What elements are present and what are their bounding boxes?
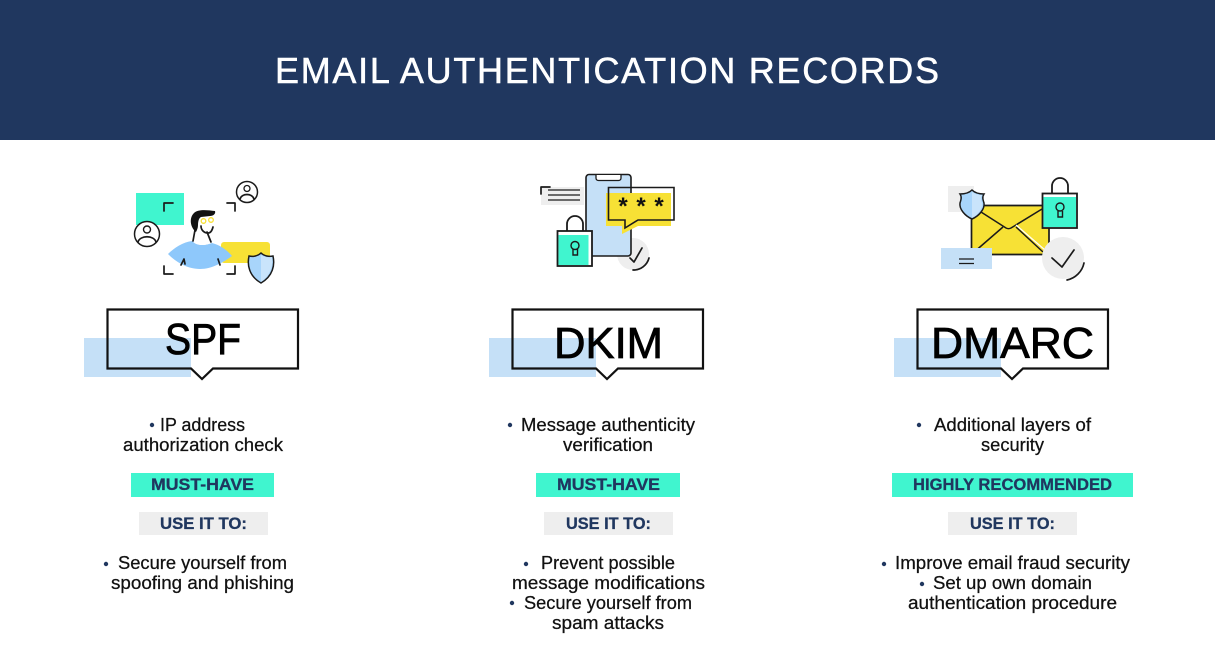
label: use it to bbox=[948, 512, 1077, 535]
badge: must-have: MUST-HAVE bbox=[151, 475, 254, 494]
use list bbox=[104, 553, 294, 593]
icon: phone with password bubble and lock: * bbox=[636, 193, 646, 220]
heading: DKIM bbox=[554, 319, 663, 368]
description: Additional layers of bbox=[934, 415, 1092, 435]
description bbox=[917, 415, 1092, 455]
icon: phone with password bubble and lock: * bbox=[654, 193, 664, 220]
label: use it to bbox=[544, 512, 673, 535]
use list: spam attacks bbox=[552, 613, 664, 633]
description: security bbox=[981, 435, 1044, 455]
use list: spoofing and phishing bbox=[111, 573, 294, 593]
DKIM callout bbox=[489, 310, 703, 379]
badge: must-have: MUST-HAVE bbox=[557, 475, 660, 494]
use list: message modifications bbox=[512, 573, 705, 593]
description bbox=[508, 415, 695, 455]
label: use it to: USE IT TO: bbox=[160, 514, 247, 533]
label: use it to: USE IT TO: bbox=[566, 514, 651, 533]
badge: must-have bbox=[536, 473, 680, 497]
header band bbox=[0, 0, 1215, 140]
heading: DMARC bbox=[931, 319, 1094, 368]
panel: DMARC bbox=[882, 178, 1133, 613]
DMARC callout bbox=[894, 310, 1108, 379]
panel: DKIM bbox=[489, 174, 705, 633]
description: IP address bbox=[160, 415, 245, 435]
SPF callout bbox=[84, 310, 298, 379]
description: authorization check bbox=[123, 435, 284, 455]
title: EMAIL AUTHENTICATION RECORDS bbox=[275, 50, 939, 91]
heading: SPF bbox=[165, 315, 241, 364]
badge: must-have bbox=[131, 473, 274, 497]
description: Message authenticity bbox=[521, 415, 695, 435]
use list bbox=[882, 553, 1130, 613]
use list: Secure yourself from bbox=[524, 593, 692, 613]
description: verification bbox=[563, 435, 653, 455]
panel: SPF bbox=[84, 182, 298, 593]
use list: Secure yourself from bbox=[118, 553, 287, 573]
description bbox=[123, 415, 284, 455]
icon: person with profiles and shield bbox=[134, 182, 274, 283]
icon: phone with password bubble and lock bbox=[541, 174, 674, 270]
use list bbox=[510, 553, 705, 633]
icon: phone with password bubble and lock: * bbox=[618, 193, 628, 220]
label: use it to: USE IT TO: bbox=[970, 514, 1055, 533]
badge: highly recommended bbox=[892, 473, 1133, 497]
label: use it to bbox=[139, 512, 268, 535]
use list: Set up own domain bbox=[933, 573, 1092, 593]
use list: authentication procedure bbox=[908, 593, 1117, 613]
icon: envelope with shield lock and check bbox=[941, 178, 1084, 280]
use list: Improve email fraud security bbox=[895, 553, 1130, 573]
use list: Prevent possible bbox=[541, 553, 675, 573]
badge: highly recommended: HIGHLY RECOMMENDED bbox=[913, 475, 1112, 494]
